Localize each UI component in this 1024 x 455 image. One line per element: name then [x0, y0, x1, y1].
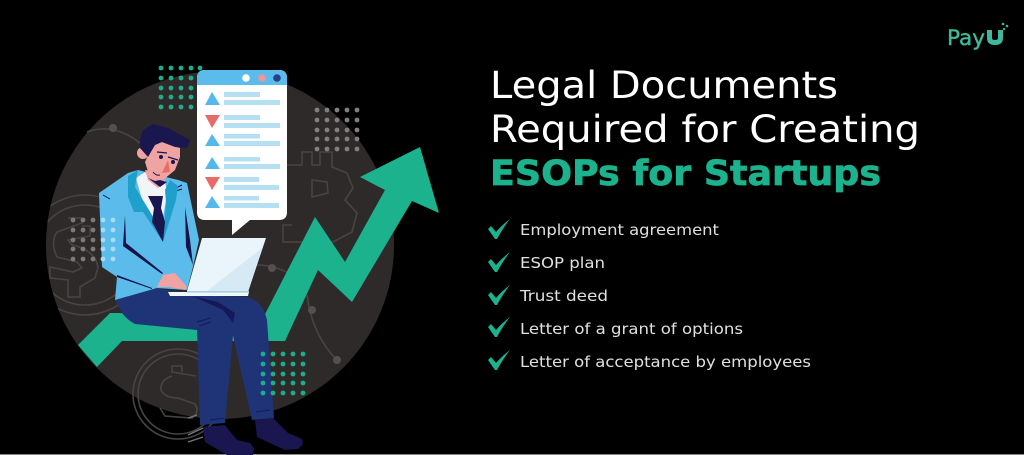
- list bars: [224, 92, 280, 208]
- bubble header: [197, 70, 287, 85]
- dot grid top left: [159, 66, 202, 109]
- logo: PayU: Pay: [947, 26, 985, 50]
- icon: bitcoin symbol: [283, 152, 357, 242]
- nose: [162, 160, 170, 173]
- beard shadow: [148, 178, 167, 187]
- eyes and brows: [153, 152, 178, 175]
- jacket: [99, 170, 199, 300]
- header dots: [242, 74, 281, 82]
- title: ESOPs for Startups: [490, 154, 881, 194]
- motion marks near shoe: [188, 415, 203, 442]
- logo: PayU: [947, 23, 1008, 50]
- head: [137, 124, 190, 188]
- trouser shadow: [192, 296, 235, 323]
- illustration: man with laptop and rising arrow: [25, 66, 439, 455]
- title: [490, 64, 920, 194]
- lapel right: [163, 180, 178, 242]
- background circle: [46, 71, 394, 419]
- tie: [148, 196, 165, 242]
- icon: dollar coin bottom: [133, 349, 223, 439]
- neck: [145, 170, 165, 188]
- item: employment agreement: Employment agreement: [520, 221, 719, 239]
- blue dots on jacket: [101, 218, 115, 261]
- ear: [137, 147, 149, 159]
- title: Legal Documents: [490, 64, 838, 107]
- circuit lines: [87, 124, 341, 364]
- item: ESOP plan: [488, 252, 605, 272]
- laptop: [168, 238, 266, 296]
- item: letter of a grant of options: Letter of a grant of options: [520, 320, 743, 338]
- dot grid bottom right: [261, 352, 305, 395]
- icon: dollar coin left: [47, 194, 118, 316]
- hand: [157, 273, 187, 290]
- trend markers: [205, 92, 220, 208]
- hair: [140, 124, 190, 157]
- item: ESOP plan: ESOP plan: [520, 254, 605, 272]
- item: trust deed: Trust deed: [519, 287, 608, 305]
- trouser folds: [197, 318, 270, 420]
- rising green arrow: [78, 147, 439, 367]
- face: [145, 142, 180, 183]
- shoes: [203, 418, 303, 455]
- item: letter of acceptance by employees: Letter of acceptance by employees: [520, 353, 811, 371]
- checklist: [488, 219, 811, 371]
- item: letter of a grant of options: [488, 317, 743, 338]
- dot grid top right: [315, 108, 359, 151]
- lapel left: [128, 170, 163, 242]
- speech bubble with list: [197, 70, 287, 235]
- shirt: [136, 172, 167, 233]
- item: trust deed: [488, 285, 608, 305]
- trousers: [115, 288, 274, 425]
- jacket dark seams: [117, 207, 193, 289]
- bubble body: [197, 70, 287, 235]
- shoulder marks: [103, 185, 182, 199]
- title: Required for Creating: [490, 108, 920, 151]
- dot grid left: [71, 218, 95, 261]
